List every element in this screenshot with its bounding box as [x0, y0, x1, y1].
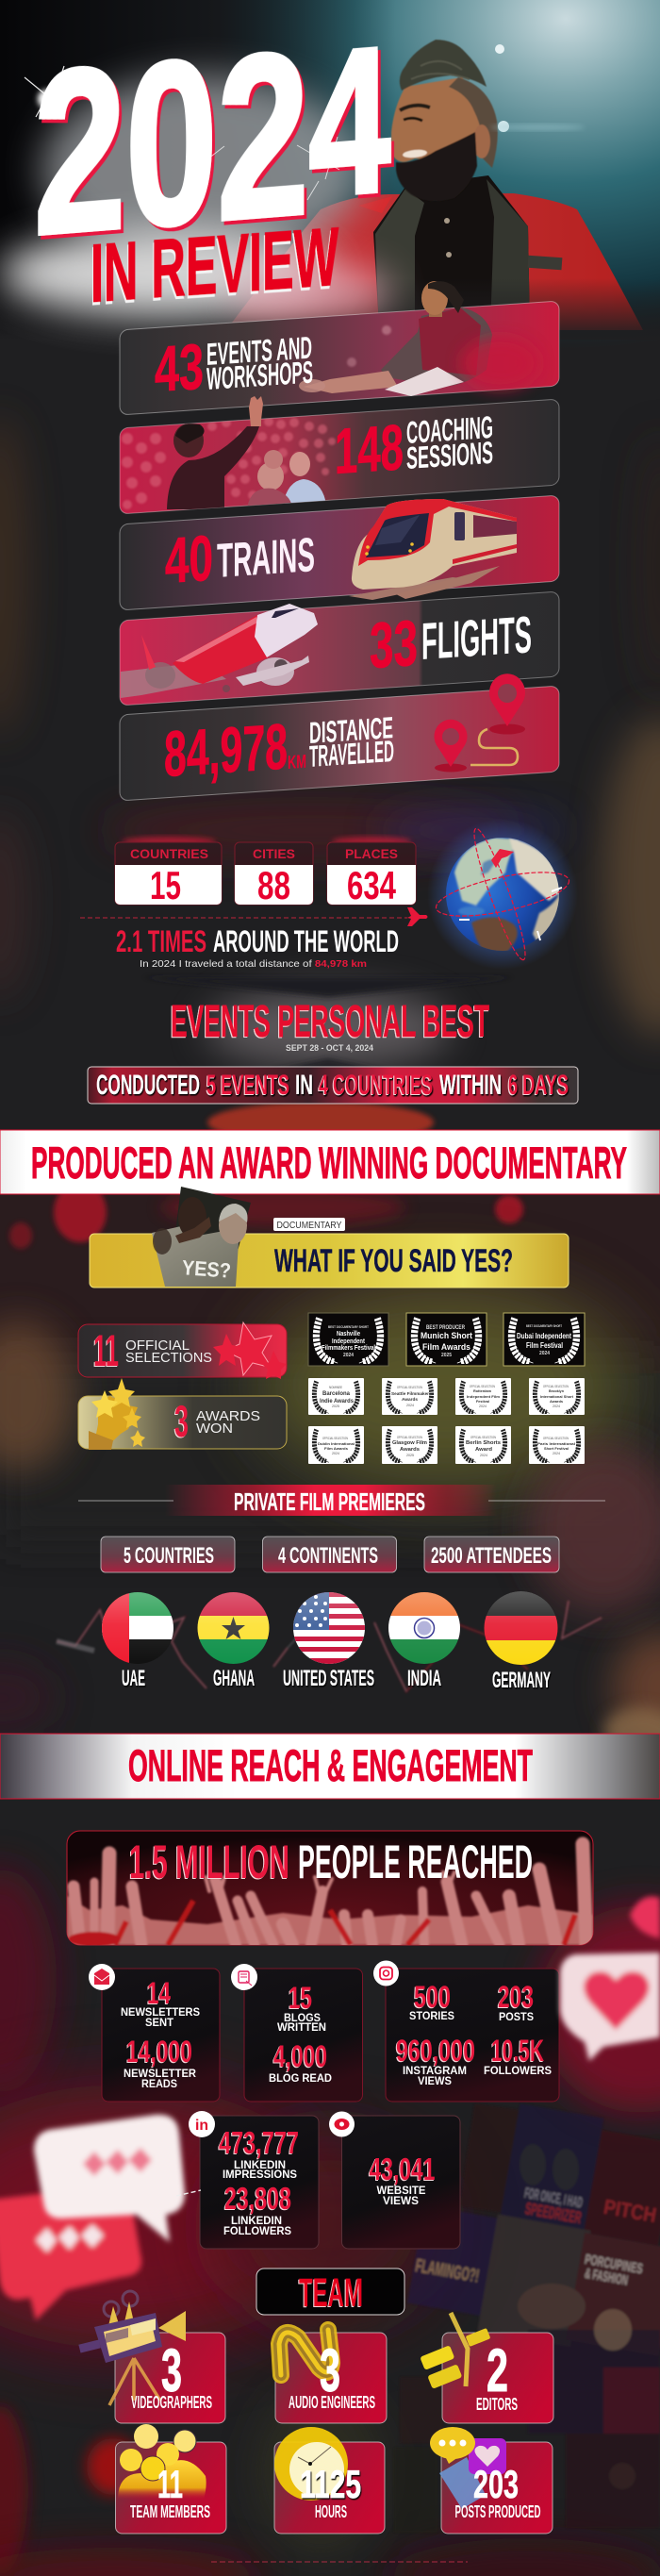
award laurel: barcelona: Indie Awards — [320, 1399, 355, 1404]
flag: Ghana — [197, 1592, 270, 1691]
callout: conducted 5 events: WITHIN — [439, 1070, 502, 1101]
award laurel: paris: OFFICIAL SELECTION — [543, 1437, 569, 1440]
eye and brow — [400, 106, 430, 110]
award laurel: dublin: Film Awards — [324, 1446, 349, 1451]
card: blogs — [231, 1964, 362, 2102]
row: 33 flights — [120, 591, 559, 706]
award laurel: nashville: BEST DOCUMENTARY SHORT — [328, 1324, 369, 1329]
team card: videographers: 3 — [161, 2336, 182, 2404]
card: 11 official selections: OFFICIAL — [125, 1338, 190, 1354]
poster — [152, 1187, 251, 1287]
card: instagram: FOLLOWERS — [484, 2064, 552, 2077]
stat: 148: 148 — [335, 411, 404, 488]
award laurel: berlin: Berlin Shorts — [466, 1440, 501, 1446]
card: linkedin: 473,777 — [219, 2125, 299, 2160]
shirt and lapels — [373, 175, 530, 330]
card: blogs: BLOG READ — [269, 2071, 332, 2085]
award laurel: brooklyn: International Short — [540, 1394, 574, 1399]
callout: conducted 5 events: 4 COUNTRIES — [319, 1070, 433, 1101]
background: poster collage: FLAMINGO?! — [414, 2255, 481, 2287]
card: instagram: 203 — [498, 1980, 534, 2014]
award laurel: dublin: 2024 — [332, 1452, 339, 1455]
face — [391, 77, 481, 162]
stat: 84,978: 84,978 — [164, 710, 288, 790]
pill: 2500 attendees — [424, 1537, 559, 1572]
stat box: cities — [235, 842, 313, 907]
award laurel: nashville: Independent — [332, 1338, 366, 1345]
speaker photo — [299, 281, 539, 396]
award laurel: berlin — [455, 1426, 511, 1464]
flag: Ghana: GHANA — [213, 1666, 255, 1691]
award laurel: glasgow: 2025 — [406, 1454, 414, 1457]
team card: posts produced: 203 — [473, 2462, 519, 2506]
title sparkles — [200, 137, 339, 200]
award laurel: barcelona: Barcelona — [322, 1391, 351, 1397]
panel: 1.5 million people reached: 1.5 MILLION — [129, 1836, 289, 1888]
heading: team — [256, 2269, 404, 2316]
card: 3 awards won: WON — [196, 1421, 233, 1437]
flag: Germany: GERMANY — [492, 1668, 551, 1693]
callout: conducted 5 events: CONDUCTED — [96, 1070, 200, 1101]
icon: blog — [231, 1964, 257, 1990]
card: 3 awards won: 3 — [174, 1396, 189, 1446]
background: poster collage: FOR ONCE, I HAD — [523, 2185, 584, 2212]
stat box: places: 634 — [347, 863, 396, 907]
team card: editors: 2 — [487, 2336, 508, 2404]
background: poster collage — [394, 2103, 660, 2533]
label: distance: DISTANCE — [309, 710, 393, 750]
award laurel: barcelona: 2025 — [332, 1404, 339, 1408]
head — [391, 40, 498, 201]
crowd hands — [67, 1844, 593, 1947]
icon: envelope — [89, 1964, 115, 1990]
stat box: places: PLACES — [345, 847, 398, 861]
card: instagram: 500 — [414, 1980, 451, 2014]
label: trains: TRAINS — [217, 527, 315, 588]
jacket — [226, 193, 643, 330]
award laurel: dubai: Dubai Independent — [517, 1332, 571, 1340]
headline: 2.1 times around the world: AROUND THE WORLD — [213, 924, 399, 958]
text: dates: SEPT 28 - OCT 4, 2024 — [286, 1043, 373, 1053]
award laurel: barcelona: NOMINEE — [329, 1386, 343, 1389]
card: blogs: BLOGS — [284, 2011, 321, 2024]
tag: documentary: DOCUMENTARY — [277, 1221, 342, 1231]
award laurel: rotterdam: Festival — [476, 1399, 489, 1404]
hero: speaker portrait — [226, 40, 643, 330]
team card: audio engineers: 3 — [320, 2336, 340, 2404]
card: instagram: INSTAGRAM — [403, 2064, 467, 2077]
card: instagram — [373, 1960, 559, 2102]
card: linkedin — [189, 2111, 319, 2249]
award laurel: nashville: Filmmakers Festival — [322, 1345, 375, 1352]
background: poster collage: & FASHION — [584, 2266, 629, 2289]
card: newsletters: SENT — [145, 2016, 174, 2029]
icon: yellow sliders — [420, 2313, 490, 2389]
callout: conducted 5 events — [88, 1067, 578, 1104]
card: blogs: 4,000 — [273, 2039, 327, 2073]
team card: audio engineers — [275, 2330, 387, 2423]
award laurel: glasgow: Awards — [400, 1447, 420, 1453]
label: workshops: WORKSHOPS — [206, 355, 313, 396]
award laurel: berlin: Award — [475, 1447, 492, 1453]
icon: instagram — [373, 1960, 399, 1986]
team card: team members: 11 — [157, 2462, 183, 2506]
callout: conducted 5 events: 5 EVENTS — [206, 1070, 289, 1101]
connector dash — [176, 2190, 201, 2196]
award laurel: barcelona — [308, 1378, 364, 1415]
card: linkedin: FOLLOWERS — [223, 2224, 291, 2237]
card: newsletters — [89, 1964, 220, 2102]
team card: hours — [274, 2427, 385, 2534]
icon: red chat bubble — [0, 2186, 141, 2320]
pill: 4 continents — [262, 1537, 396, 1572]
callout: conducted 5 events: IN — [295, 1070, 313, 1101]
stat box: countries: COUNTRIES — [130, 847, 208, 861]
stat: 43: 43 — [155, 331, 204, 406]
hair — [400, 40, 487, 91]
dashed flight line — [80, 917, 407, 919]
card: newsletters: 14 — [147, 1976, 171, 2010]
pill: 4 continents: 4 CONTINENTS — [278, 1543, 378, 1569]
unit: km: KM — [288, 752, 306, 773]
award laurel: nashville — [308, 1313, 388, 1366]
card: newsletters: 14,000 — [126, 2035, 192, 2069]
icon: small plane — [407, 907, 428, 926]
pill: 5 countries — [101, 1537, 235, 1572]
award laurel: munich: BEST PRODUCER — [426, 1325, 466, 1331]
stat: 33: 33 — [370, 607, 418, 682]
flag: India: INDIA — [407, 1666, 441, 1691]
icon: heart bubble — [560, 1953, 660, 2061]
award laurel: brooklyn: Brooklyn — [549, 1388, 565, 1393]
award laurel: seattle: 2024 — [406, 1404, 414, 1407]
flag: UAE: UAE — [122, 1666, 145, 1691]
card: newsletters: READS — [141, 2077, 177, 2090]
team card: posts produced — [430, 2427, 553, 2534]
smile — [403, 149, 427, 158]
stat box: countries: 15 — [150, 863, 181, 907]
ear — [473, 125, 490, 158]
award laurel: paris — [529, 1426, 585, 1464]
stat box: places — [327, 837, 416, 907]
award laurel: berlin: 2024 — [480, 1454, 487, 1457]
award laurel: brooklyn — [529, 1378, 585, 1415]
card: website views: WEBSITE — [377, 2184, 426, 2197]
team card: hours: HOURS — [315, 2502, 347, 2521]
title: 2024: 202 — [34, 0, 421, 284]
pill: 5 countries: 5 COUNTRIES — [124, 1543, 214, 1569]
card: blogs: WRITTEN — [277, 2020, 326, 2034]
banner: online reach and engagement — [0, 1734, 660, 1799]
icon: clock — [274, 2427, 348, 2501]
award laurel: brooklyn: OFFICIAL SELECTION — [543, 1385, 569, 1388]
icon: people group — [118, 2424, 206, 2500]
icon: route pins — [434, 673, 525, 772]
award laurel: munich: Film Awards — [422, 1342, 470, 1352]
stat box: cities: 88 — [257, 863, 290, 907]
card: 3 awards won — [78, 1378, 287, 1450]
team card: editors: EDITORS — [476, 2395, 518, 2414]
award laurel: dubai: 2024 — [539, 1351, 550, 1356]
globe with orbits — [427, 819, 578, 970]
flag: India — [388, 1592, 460, 1691]
team card: audio engineers: AUDIO ENGINEERS — [289, 2393, 375, 2412]
card: linkedin: IMPRESSIONS — [223, 2168, 297, 2181]
label: sessions: SESSIONS — [406, 435, 493, 475]
hero lower fade — [0, 278, 660, 340]
heading: private film premieres — [78, 1485, 605, 1516]
award laurel: brooklyn: Awards — [550, 1399, 564, 1404]
card: instagram: POSTS — [499, 2010, 534, 2023]
team card: posts produced: POSTS PRODUCED — [454, 2502, 541, 2521]
flag: UAE — [102, 1592, 173, 1691]
title: WHAT IF YOU SAID YES? — [274, 1243, 513, 1279]
card: linkedin: LINKEDIN — [231, 2214, 282, 2227]
icon: linkedin — [189, 2111, 215, 2137]
heading: team: TEAM — [299, 2270, 363, 2316]
card: instagram: 10.5K — [491, 2034, 544, 2068]
award laurel: munich: 2025 — [441, 1353, 452, 1358]
headline: 2.1 times around the world — [116, 924, 399, 958]
row: 148 coaching sessions — [120, 396, 559, 514]
team card: team members: TEAM MEMBERS — [130, 2502, 210, 2521]
card: 3 awards won: AWARDS — [196, 1408, 260, 1424]
row: 40 trains — [120, 495, 559, 610]
decorative lightning behind flags — [57, 1601, 602, 1691]
title: 2024: 4 — [308, 4, 390, 241]
bright stage lights — [495, 44, 504, 54]
card: blogs: 15 — [289, 1981, 312, 2015]
banner: what if you said yes — [90, 1187, 569, 1288]
icon: gold N stripes — [279, 2330, 332, 2375]
team card: videographers — [78, 2291, 225, 2423]
award laurel: munich: Munich Short — [421, 1331, 472, 1340]
card: 11 official selections: 11 — [93, 1325, 119, 1375]
icon: small pink heart — [630, 1896, 660, 1938]
shaved side — [449, 77, 498, 168]
card: 11 official selections — [78, 1322, 287, 1379]
team card: hours: 1125 — [300, 2462, 361, 2506]
stat: 40: 40 — [165, 523, 213, 597]
raised hand — [249, 396, 263, 426]
icon: eye — [329, 2111, 355, 2137]
award laurel: dublin: OFFICIAL SELECTION — [322, 1437, 348, 1440]
row: 33 flights: FLIGHTS — [421, 605, 532, 671]
hero: white fog behind title — [0, 66, 391, 321]
award laurel: rotterdam: 2024 — [479, 1404, 487, 1408]
team card: videographers: VIDEOGRAPHERS — [131, 2393, 212, 2412]
team card: team members — [115, 2424, 226, 2534]
award laurel: seattle: OFFICIAL SELECTION — [397, 1386, 422, 1389]
background: poster collage: SPEEDRIZER — [524, 2199, 583, 2227]
award laurel: rotterdam: OFFICIAL SELECTION — [470, 1385, 495, 1388]
icon: train — [349, 499, 517, 600]
icon: linkedin: in — [195, 2118, 208, 2134]
award laurel: glasgow: OFFICIAL SELECTION — [397, 1436, 422, 1439]
icon: social media tiles — [430, 2427, 506, 2509]
title: in review: IN REVIEW — [91, 211, 338, 320]
award laurel: seattle: Awards — [402, 1397, 419, 1402]
award laurel: nashville: Nashville — [337, 1331, 360, 1338]
award laurel: paris: Paris International — [537, 1441, 575, 1446]
team card: editors — [420, 2313, 553, 2423]
award laurel: glasgow: Glasgow Film — [392, 1440, 427, 1446]
card: linkedin: LINKEDIN — [234, 2158, 286, 2171]
text: total distance: In 2024 I traveled a total distance of 84,978 km — [140, 958, 367, 970]
award laurel: dublin: Dublin International — [318, 1441, 355, 1446]
bottom dashed line — [211, 2561, 468, 2563]
crowd photo — [122, 417, 336, 509]
label: coaching: COACHING — [406, 409, 493, 450]
award laurel: berlin: OFFICIAL SELECTION — [470, 1436, 496, 1439]
award laurel: dubai: Film Festival — [526, 1341, 563, 1350]
card: newsletters: NEWSLETTER — [124, 2067, 196, 2080]
award laurel: rotterdam — [455, 1378, 511, 1415]
row: 43 events and workshops — [120, 281, 559, 415]
stat box: cities: CITIES — [253, 847, 295, 861]
beard — [396, 132, 477, 201]
flag: United States — [283, 1592, 374, 1691]
icon: gold stars — [89, 1378, 145, 1450]
award laurel: dublin — [308, 1426, 364, 1464]
card: instagram: STORIES — [409, 2009, 454, 2022]
flag: United States: UNITED STATES — [283, 1666, 374, 1691]
icon: film camera — [78, 2291, 186, 2405]
icon: red stars — [213, 1322, 287, 1379]
row: 84,978 km distance travelled — [120, 673, 559, 801]
award laurel: rotterdam: Independent Film — [467, 1394, 500, 1399]
icon: white chat bubble — [34, 2115, 185, 2242]
label: events and: EVENTS AND — [206, 330, 312, 372]
panel: 1.5 million people reached — [67, 1831, 593, 1947]
flag: Germany — [484, 1591, 558, 1693]
card: website views: 43,041 — [370, 2152, 436, 2186]
card: website views: VIEWS — [383, 2194, 419, 2207]
award laurel: dubai: BEST DOCUMENTARY SHORT — [526, 1323, 562, 1328]
award laurel: rotterdam: Rotterdam — [473, 1388, 491, 1393]
award laurel: munich — [406, 1313, 487, 1366]
award laurel: dubai — [503, 1313, 585, 1366]
card: linkedin: 23,808 — [224, 2181, 291, 2216]
heading: private film premieres: PRIVATE FILM PREMIERES — [234, 1487, 425, 1516]
award laurel: seattle: Seattle Filmmaker — [391, 1391, 429, 1396]
icon: airplane — [121, 604, 318, 698]
pill: 2500 attendees: 2500 ATTENDEES — [431, 1543, 552, 1569]
award laurel: seattle — [382, 1378, 437, 1415]
card: website views — [329, 2111, 460, 2249]
card: instagram: 960,000 — [396, 2034, 475, 2068]
callout: conducted 5 events: 6 DAYS — [508, 1070, 569, 1101]
row: 84,978 km distance travelled: TRAVELLED — [309, 734, 394, 773]
award laurel: paris: 2024 — [553, 1452, 560, 1455]
poster: YES? — [181, 1255, 232, 1283]
award laurel: glasgow — [382, 1426, 437, 1464]
card: instagram: VIEWS — [418, 2074, 452, 2087]
award laurel: nashville: 2024 — [343, 1353, 354, 1358]
award laurel: brooklyn: 2024 — [553, 1404, 560, 1408]
award laurel: paris: Short Festival — [544, 1446, 569, 1451]
card: newsletters: NEWSLETTERS — [121, 2005, 200, 2019]
headline: 2.1 times around the world: 2.1 TIMES — [116, 924, 206, 958]
stat box: countries — [115, 837, 222, 907]
card: 11 official selections: SELECTIONS — [125, 1350, 212, 1366]
